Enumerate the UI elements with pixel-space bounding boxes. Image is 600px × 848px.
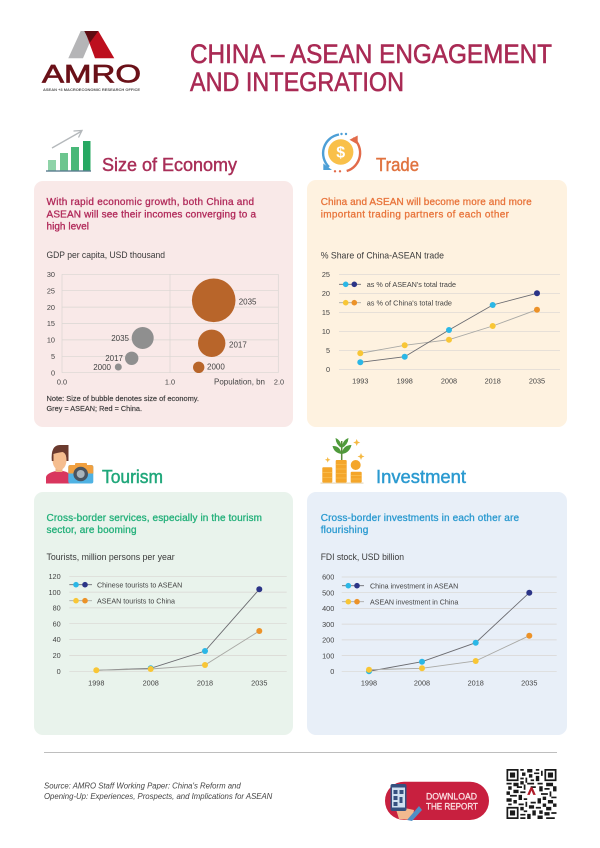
logo: AMRO: AMRO bbox=[42, 60, 141, 88]
panel heading: investment bbox=[321, 513, 519, 536]
legend: trade bbox=[339, 280, 456, 307]
panel heading: economy: high level bbox=[46, 221, 89, 232]
legend: tourists: ASEAN tourists to China bbox=[97, 596, 176, 605]
line chart: trade share: 10 bbox=[322, 327, 330, 336]
source note bbox=[44, 780, 273, 801]
line chart: trade share: 1998 bbox=[397, 376, 413, 385]
icon: phone in hand bbox=[390, 784, 422, 821]
line chart: tourists: 120 bbox=[49, 572, 61, 581]
line chart: FDI stock: 2018 bbox=[468, 679, 484, 688]
line chart: FDI stock: 200 bbox=[322, 636, 334, 645]
legend: FDI stock bbox=[342, 581, 459, 606]
chart note bbox=[46, 394, 199, 413]
icon: trade cycle with dollar coin bbox=[323, 133, 360, 172]
bubble chart: 2000 bbox=[93, 363, 112, 372]
line chart: tourists: 20 bbox=[53, 651, 61, 660]
line chart: FDI stock: 600 bbox=[322, 573, 334, 582]
title bbox=[190, 39, 552, 97]
icon: coin stacks with plant bbox=[320, 438, 364, 484]
bubble chart: 2017 bbox=[105, 354, 124, 363]
legend: trade: as % of ASEAN's total trade bbox=[367, 280, 456, 289]
line chart: FDI stock: 500 bbox=[322, 588, 334, 597]
panel heading: investment: Cross-border investments in each other are bbox=[321, 513, 519, 524]
chart note: Note: Size of bubble denotes size of economy. bbox=[46, 394, 199, 403]
bubble chart: 2.0 bbox=[274, 378, 284, 386]
button: download the report: DOWNLOAD bbox=[426, 791, 477, 802]
line chart: FDI stock: 2035 bbox=[521, 679, 537, 688]
line chart: tourists: 1998 bbox=[88, 679, 104, 688]
bubble chart: 2035 bbox=[111, 334, 130, 343]
chart subtitle: FDI stock: FDI stock, USD billion bbox=[321, 552, 404, 562]
line chart: FDI stock: 400 bbox=[322, 604, 334, 613]
line chart: trade share: 5 bbox=[326, 346, 330, 355]
line chart: trade share: 2008 bbox=[441, 376, 457, 385]
button: download the report bbox=[385, 782, 489, 821]
line chart: trade share: 2018 bbox=[485, 376, 501, 385]
bubble chart: 1.0 bbox=[165, 378, 175, 386]
bubble chart: 2035 bbox=[239, 297, 257, 306]
bubble chart: Population, bn bbox=[214, 378, 265, 386]
bubble chart: 20 bbox=[47, 303, 55, 312]
line chart: trade share bbox=[322, 270, 560, 385]
line chart: trade share: 2035 bbox=[529, 376, 545, 385]
icon: rising bar chart bbox=[46, 130, 91, 172]
panel: size of economy bbox=[34, 181, 293, 427]
bubble chart: 2017 bbox=[229, 341, 247, 350]
panel heading: economy: With rapid economic growth, both China and bbox=[46, 197, 254, 208]
line chart: FDI stock: 1998 bbox=[361, 679, 377, 688]
chart subtitle: share of trade: % Share of China-ASEAN trade bbox=[321, 250, 444, 260]
panel heading: tourism: Cross-border services, especially in the tourism bbox=[46, 513, 262, 524]
panel: tourism bbox=[34, 492, 293, 735]
line chart: FDI stock: 100 bbox=[322, 651, 334, 660]
panel heading: investment: flourishing bbox=[321, 525, 368, 536]
bubble chart: 0 bbox=[51, 368, 55, 377]
bubble chart: 5 bbox=[51, 352, 55, 361]
line chart: tourists: 2008 bbox=[143, 679, 159, 688]
legend: tourists bbox=[69, 580, 182, 605]
legend: FDI stock: ASEAN investment in China bbox=[370, 597, 459, 606]
line chart: FDI stock: 0 bbox=[330, 667, 334, 676]
legend: trade: as % of China's total trade bbox=[367, 298, 452, 307]
source note: Source: AMRO Staff Working Paper: China's Reform and bbox=[44, 780, 241, 790]
line chart: FDI stock: 2008 bbox=[414, 679, 430, 688]
logo: AMRO: ASEAN +3 MACROECONOMIC RESEARCH OFFICE bbox=[43, 88, 141, 92]
line chart: trade share: 20 bbox=[322, 289, 330, 298]
line chart: tourists: 60 bbox=[53, 619, 61, 628]
chart subtitle: GDP per capita: GDP per capita, USD thousand bbox=[46, 250, 165, 260]
line chart: tourists: 40 bbox=[53, 635, 61, 644]
line chart: FDI stock: 300 bbox=[322, 620, 334, 629]
panel: investment bbox=[307, 492, 567, 735]
icon: tourist with camera bbox=[46, 445, 93, 484]
line chart: tourists: 100 bbox=[49, 588, 61, 597]
bubble chart: 25 bbox=[47, 286, 55, 295]
bubble chart: 2000 bbox=[207, 362, 225, 372]
panel heading: trade bbox=[321, 197, 532, 220]
panel heading: trade: important trading partners of each other bbox=[321, 209, 510, 220]
line chart: tourists bbox=[49, 572, 287, 688]
line chart: trade share: 15 bbox=[322, 308, 330, 317]
legend: tourists: Chinese tourists to ASEAN bbox=[97, 580, 182, 589]
chart subtitle: tourists: Tourists, million persons per year bbox=[46, 552, 175, 562]
heading: Trade: Trade bbox=[376, 154, 419, 175]
panel heading: tourism bbox=[46, 513, 262, 536]
panel heading: economy: ASEAN will see their incomes converging to a bbox=[46, 209, 256, 220]
line chart: trade share: 25 bbox=[322, 270, 330, 279]
line chart: tourists: 80 bbox=[53, 604, 61, 613]
panel heading: economy bbox=[46, 197, 256, 232]
line chart: trade share: 1993 bbox=[352, 376, 368, 385]
line chart: tourists: 0 bbox=[57, 667, 61, 676]
QR code bbox=[506, 769, 556, 819]
logo: AMRO bbox=[42, 31, 141, 92]
heading: Tourism: Tourism bbox=[102, 466, 163, 487]
legend: FDI stock: China investment in ASEAN bbox=[370, 581, 458, 590]
panel heading: trade: China and ASEAN will become more and more bbox=[321, 197, 532, 208]
line chart: tourists: 2018 bbox=[197, 679, 213, 688]
line chart: FDI stock bbox=[322, 573, 557, 688]
line chart: trade share: 0 bbox=[326, 365, 330, 374]
bubble chart: 10 bbox=[47, 336, 55, 345]
heading: Investment: Investment bbox=[376, 466, 466, 487]
bubble chart: 30 bbox=[47, 270, 55, 279]
icon: trade cycle with dollar coin: $ bbox=[336, 145, 345, 162]
chart note: Grey = ASEAN; Red = China. bbox=[46, 404, 142, 413]
line chart: tourists: 2035 bbox=[251, 679, 267, 688]
heading: Size of Economy: Size of Economy bbox=[102, 154, 238, 175]
source note: Opening-Up: Experiences, Prospects, and Implications for ASEAN bbox=[44, 791, 273, 801]
title: AND INTEGRATION bbox=[190, 67, 404, 97]
title: CHINA – ASEAN ENGAGEMENT bbox=[190, 39, 552, 69]
bubble chart: 15 bbox=[47, 319, 55, 328]
button: download the report: THE REPORT bbox=[426, 801, 478, 812]
bubble chart bbox=[47, 270, 284, 386]
panel: trade bbox=[307, 180, 567, 427]
bubble chart: 0.0 bbox=[57, 378, 67, 386]
panel heading: tourism: sector, are booming bbox=[46, 525, 136, 536]
